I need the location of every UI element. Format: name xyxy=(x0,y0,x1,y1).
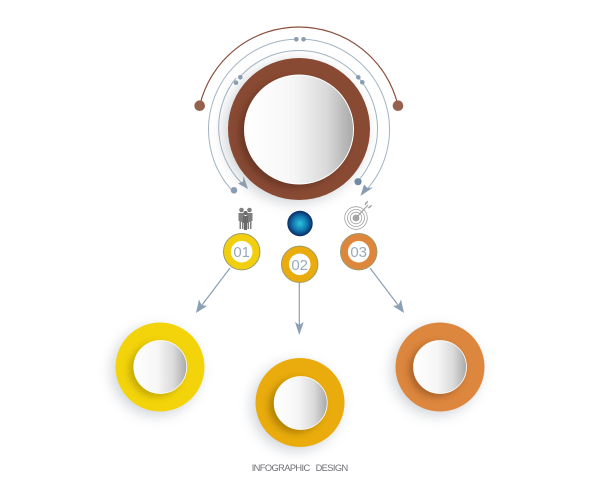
arrow: 01 to yellow ring xyxy=(196,268,230,313)
amber ring xyxy=(251,358,344,452)
outer brown arc xyxy=(194,27,403,111)
icon: people xyxy=(238,208,252,230)
badge 01: 01 xyxy=(233,244,250,261)
icon: target xyxy=(345,201,372,229)
badge 03: 03 xyxy=(350,244,367,261)
badge 02: 02 xyxy=(291,257,308,274)
connector arcs with dots and arrowheads xyxy=(209,37,390,196)
arrow: 02 to amber ring xyxy=(295,283,304,335)
caption: INFOGRAPHIC DESIGN xyxy=(252,463,348,473)
badge 01 xyxy=(224,234,260,270)
arrow: 03 to orange ring xyxy=(370,268,404,313)
yellow ring xyxy=(111,322,204,416)
badge 02 xyxy=(282,246,318,282)
icon: blue sphere xyxy=(287,211,313,236)
orange ring xyxy=(391,322,484,416)
badge 03 xyxy=(340,234,377,270)
main brown ring xyxy=(223,58,370,204)
